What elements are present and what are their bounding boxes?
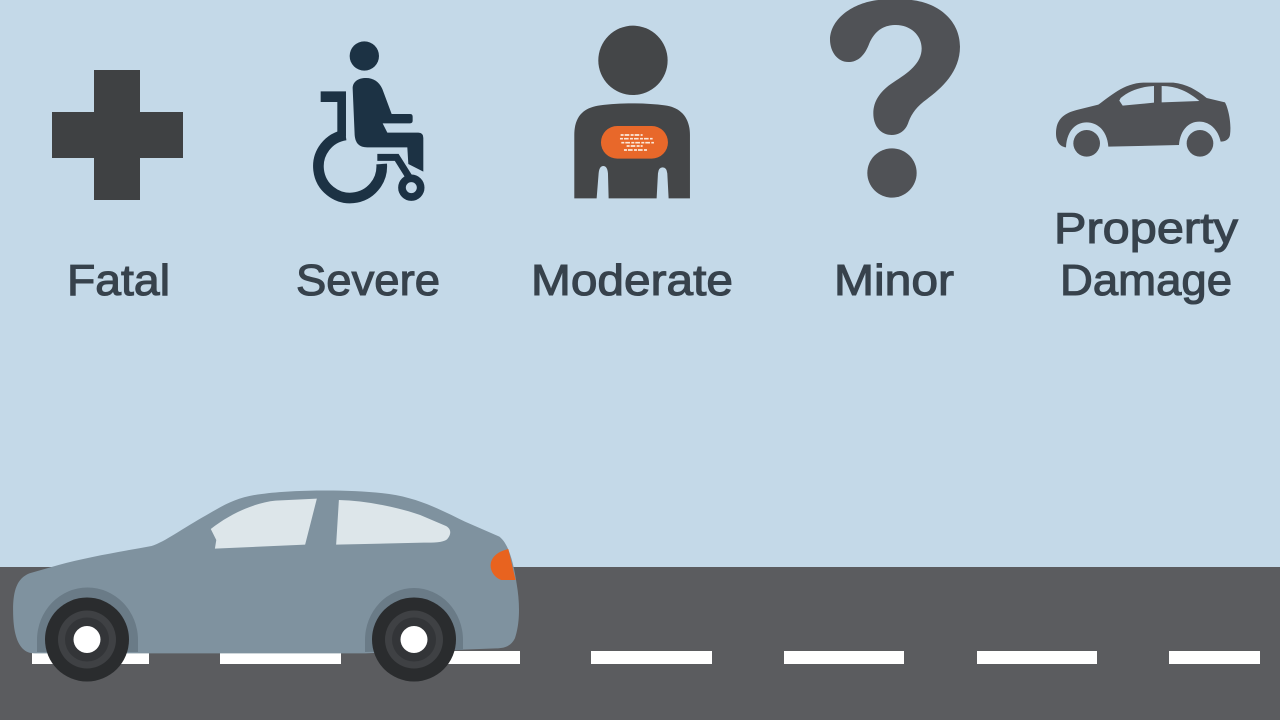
icon: question mark — [830, 0, 960, 198]
icon: fatal cross — [52, 70, 183, 200]
badge: orange injury patch — [601, 126, 668, 159]
label: Property Damage: Property — [1054, 204, 1238, 253]
rear wheel — [365, 588, 463, 682]
label: Minor: Minor — [834, 256, 954, 305]
label: Moderate: Moderate — [531, 256, 733, 305]
front wheel — [37, 587, 138, 682]
road — [0, 567, 1280, 720]
label: Severe: Severe — [296, 256, 440, 305]
icon: property damage car — [1056, 83, 1230, 157]
icon: wheelchair — [318, 41, 423, 198]
icon: moderate injury torso — [574, 26, 690, 198]
car body — [13, 490, 519, 653]
label: Property Damage: Damage — [1060, 256, 1232, 305]
illustration: grey car on road — [13, 490, 519, 682]
label: Fatal: Fatal — [67, 256, 170, 305]
label: Property Damage — [1054, 204, 1238, 305]
